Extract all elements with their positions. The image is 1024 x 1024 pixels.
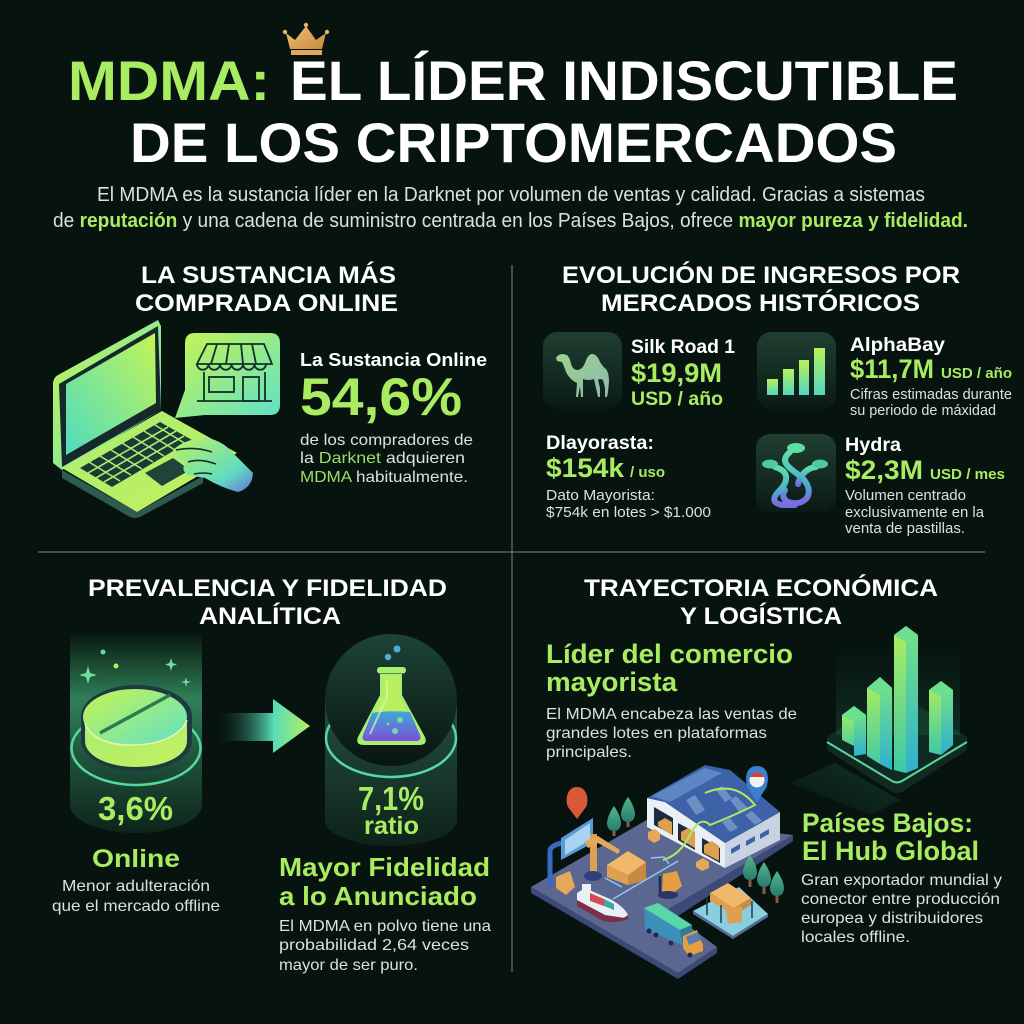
text: países bajos: locales offline. xyxy=(801,929,910,946)
text: líder del comercio mayorista: Líder del comercio xyxy=(546,639,793,669)
item: Hydra xyxy=(845,435,1005,537)
icon: hand xyxy=(172,437,253,492)
text: líder del comercio mayorista: grandes lotes en plataformas xyxy=(546,725,767,742)
text: mayor fidelidad: a lo Anunciado xyxy=(279,881,477,911)
stat: 54,6%: la Darknet adquieren xyxy=(300,450,465,467)
heading xyxy=(88,575,447,630)
icon: bars xyxy=(757,332,836,409)
stat: 54,6%: 54,6% xyxy=(300,368,462,427)
item: Hydra: exclusivamente en la xyxy=(845,505,985,521)
item: AlphaBay xyxy=(850,335,1012,419)
item: AlphaBay: Cifras estimadas durante xyxy=(850,387,1012,403)
intro text: de reputación y una cadena de suministro centrada en los Países Bajos, ofrece mayor pureza y fidelidad. xyxy=(53,210,968,232)
item: AlphaBay: su periodo de máxidad xyxy=(850,403,996,419)
heading: COMPRADA ONLINE xyxy=(135,290,398,317)
heading xyxy=(584,574,938,630)
item: Silk Road 1: Silk Road 1 xyxy=(631,337,735,358)
item: Dlayorasta: Dato Mayorista: xyxy=(546,488,655,504)
route lines xyxy=(663,789,755,860)
text: mayor fidelidad: El MDMA en polvo tiene una xyxy=(279,918,491,935)
item: Dlayorasta: Dlayorasta: xyxy=(546,433,654,454)
stat: 54,6%: MDMA habitualmente. xyxy=(300,469,468,486)
icon: store speech bubble xyxy=(175,333,280,418)
heading: PREVALENCIA Y FIDELIDAD xyxy=(88,575,447,602)
stat: 3,6% online: 3,6% xyxy=(98,790,173,827)
chart: 3D bars xyxy=(790,626,967,815)
dock lines xyxy=(605,857,678,899)
panel: prevalencia y fidelidad analítica xyxy=(52,575,491,974)
icon: pill cylinder xyxy=(70,633,202,833)
text: países bajos: europea y distribuidores xyxy=(801,910,983,927)
pin: Netherlands flag xyxy=(746,766,768,802)
stat: 3,6% online: Menor adulteración xyxy=(62,878,210,895)
crane xyxy=(584,834,620,881)
text: líder del comercio mayorista: El MDMA encabeza las ventas de xyxy=(546,706,797,723)
heading xyxy=(562,261,960,317)
stat: 7,1% ratio: 7,1% xyxy=(358,780,424,817)
text: mayor fidelidad: mayor de ser puro. xyxy=(279,957,418,974)
text: países bajos: Gran exportador mundial y xyxy=(801,872,1002,889)
title: DE LOS CRIPTOMERCADOS xyxy=(130,111,897,174)
panel: la sustancia más comprada online xyxy=(53,261,487,518)
heading: EVOLUCIÓN DE INGRESOS POR xyxy=(562,261,960,289)
text: países bajos xyxy=(801,808,1002,946)
item: Dlayorasta: $754k en lotes > $1.000 xyxy=(546,505,711,521)
stat: 54,6%: de los compradores de xyxy=(300,432,473,449)
ground xyxy=(531,818,793,979)
stat: 3,6% online: que el mercado offline xyxy=(52,898,220,915)
item: Hydra: Volumen centrado xyxy=(845,488,966,504)
stat: 3,6% online: Online xyxy=(92,845,180,873)
icon: camel xyxy=(543,332,622,409)
item: Hydra: $2,3M xyxy=(845,455,923,485)
item: Hydra: Hydra xyxy=(845,435,901,456)
intro text xyxy=(53,184,968,232)
illustration: warehouse logistics xyxy=(531,765,793,979)
stat: 54,6% xyxy=(300,349,487,486)
item: Silk Road 1: USD / año xyxy=(631,389,723,410)
sparkles xyxy=(79,650,191,687)
text: líder del comercio mayorista: mayorista xyxy=(546,667,678,697)
truck xyxy=(644,903,703,958)
pin: red xyxy=(567,787,587,819)
heading: MERCADOS HISTÓRICOS xyxy=(601,289,920,317)
item: Silk Road 1 xyxy=(631,337,735,410)
heading: ANALÍTICA xyxy=(199,602,341,630)
forklift xyxy=(658,871,682,899)
stat: 7,1% ratio xyxy=(358,780,424,840)
heading: LA SUSTANCIA MÁS xyxy=(141,261,396,289)
icon: crown xyxy=(283,23,329,55)
item: Dlayorasta: $154k xyxy=(546,453,625,483)
item: Dlayorasta xyxy=(546,433,711,521)
item: AlphaBay: $11,7M xyxy=(850,354,934,384)
item: AlphaBay: AlphaBay xyxy=(850,335,945,356)
title: EL LÍDER INDISCUTIBLE xyxy=(290,49,958,112)
text: mayor fidelidad xyxy=(279,852,491,974)
icon: hydra xyxy=(756,434,836,512)
text: países bajos: conector entre producción xyxy=(801,891,1000,908)
ship xyxy=(577,884,628,922)
heading: TRAYECTORIA ECONÓMICA xyxy=(584,574,938,602)
pallet rack xyxy=(693,883,768,939)
heading: Y LOGÍSTICA xyxy=(680,602,842,630)
item: AlphaBay: USD / año xyxy=(941,365,1012,382)
monitor xyxy=(550,818,593,887)
stat: 7,1% ratio: ratio xyxy=(364,812,419,840)
panel: evolución de ingresos xyxy=(543,261,1012,537)
text: líder del comercio mayorista xyxy=(546,639,797,761)
icon: flask cylinder xyxy=(325,634,457,846)
text: mayor fidelidad: Mayor Fidelidad xyxy=(279,852,490,882)
arrow xyxy=(220,699,310,753)
stat: 3,6% online xyxy=(52,790,220,915)
text: mayor fidelidad: probabilidad 2,64 veces xyxy=(279,937,469,954)
icon: laptop xyxy=(53,320,237,518)
item: Hydra: USD / mes xyxy=(930,466,1005,483)
trees xyxy=(607,797,784,903)
stat: 54,6%: La Sustancia Online xyxy=(300,349,487,370)
title xyxy=(68,49,958,174)
text: países bajos: El Hub Global xyxy=(802,836,979,866)
heading xyxy=(135,261,398,317)
intro text: El MDMA es la sustancia líder en la Darknet por volumen de ventas y calidad. Gracias a sistemas xyxy=(97,184,925,206)
warehouse xyxy=(647,765,780,868)
item: Silk Road 1: $19,9M xyxy=(631,358,722,388)
text: países bajos: Países Bajos: xyxy=(802,808,973,838)
panel: trayectoria económica y logística xyxy=(531,574,1002,979)
item: Dlayorasta: / uso xyxy=(630,464,665,481)
title: MDMA: xyxy=(68,49,270,112)
item: Hydra: venta de pastillas. xyxy=(845,521,965,537)
text: líder del comercio mayorista: principales. xyxy=(546,744,632,761)
boxes xyxy=(556,829,709,895)
